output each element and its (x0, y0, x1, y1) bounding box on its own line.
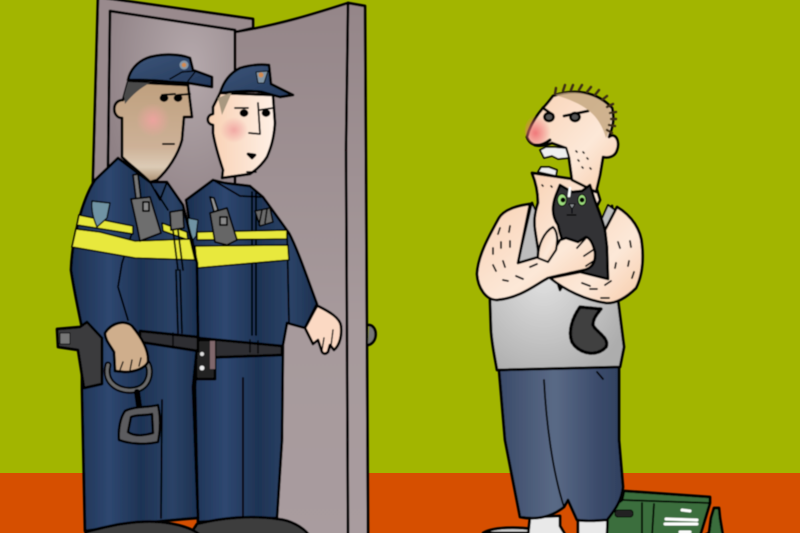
orange floor (0, 473, 800, 533)
finger lines (577, 238, 595, 266)
arm hair (493, 226, 634, 298)
right officer radio (210, 197, 237, 245)
door frame (93, 0, 253, 300)
man forearm, reaching across (477, 204, 595, 300)
lower teeth (538, 167, 557, 176)
left officer body (71, 158, 198, 531)
man trousers (499, 366, 623, 521)
man holding cat (477, 85, 723, 533)
right officer body (186, 180, 317, 522)
right officer head (208, 92, 275, 178)
holster (57, 322, 102, 388)
left officer cap (128, 55, 212, 87)
left officer head (114, 82, 192, 182)
right officer shoulder clip (255, 208, 273, 226)
open door panel (235, 3, 376, 533)
left officer belt (140, 331, 198, 351)
left officer tie and zip (150, 182, 183, 270)
right officer belt (196, 338, 282, 379)
right officer cap (220, 65, 293, 97)
cat eyes (558, 194, 586, 206)
hair (555, 92, 611, 138)
stubble (542, 151, 591, 187)
right officer yellow stripes (195, 230, 289, 268)
police officer, left (57, 55, 212, 533)
police officer, right (186, 65, 341, 533)
crate of bottles (607, 491, 723, 533)
right officer boots (190, 517, 309, 533)
man second arm (550, 207, 643, 303)
man head and neck (525, 85, 618, 192)
eyes (543, 108, 588, 116)
cat tail (570, 307, 607, 353)
left officer hand (105, 323, 148, 372)
right officer hand (305, 306, 341, 354)
left officer yellow stripes (72, 215, 195, 260)
upper teeth (540, 147, 569, 159)
left officer shoulder badge (92, 201, 110, 227)
upper lip (535, 140, 550, 145)
man vest (490, 203, 624, 370)
cat (553, 185, 608, 279)
left officer radio (131, 174, 184, 241)
right officer shoulder badge (188, 218, 198, 240)
man chest and lower jaw (532, 173, 600, 262)
left officer boots (85, 522, 200, 533)
handcuffs (107, 363, 160, 444)
man gripping fingers (538, 227, 557, 262)
man shoes (483, 516, 608, 533)
